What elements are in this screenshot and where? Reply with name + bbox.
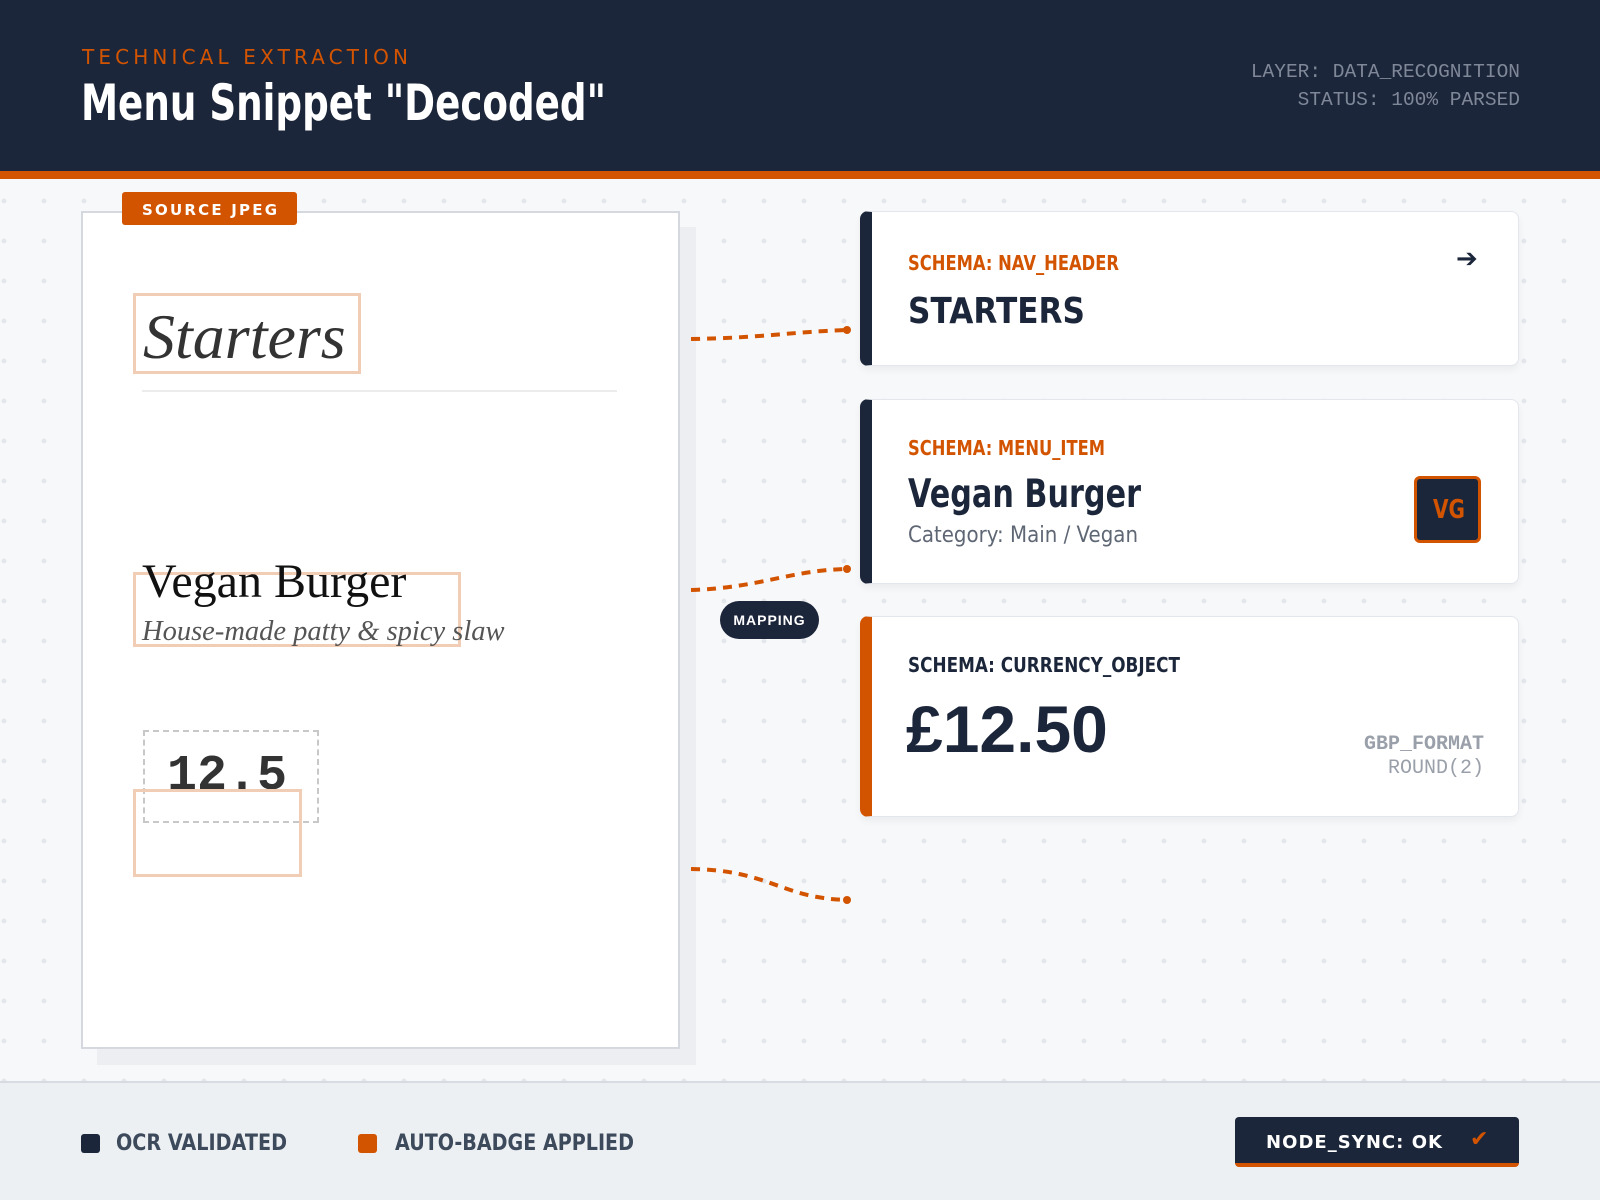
nav header schema: SCHEMA: NAV_HEADER bbox=[908, 251, 1119, 275]
price ocr boxes bbox=[133, 730, 319, 877]
status button: ✔ bbox=[1470, 1127, 1488, 1152]
menu item schema: SCHEMA: MENU_ITEM bbox=[908, 436, 1105, 460]
footer bbox=[0, 1081, 1600, 1200]
panel: source jpeg bbox=[81, 192, 696, 1065]
card: currency object: ROUND(2) bbox=[1388, 757, 1484, 780]
card: currency object: GBP_FORMAT bbox=[1364, 733, 1484, 756]
badge: VG bbox=[1414, 476, 1481, 543]
mapping pill bbox=[720, 601, 819, 639]
legend: ocr validated: OCR VALIDATED bbox=[116, 1131, 287, 1156]
status text: LAYER: DATA_RECOGNITION bbox=[1251, 61, 1520, 83]
header bbox=[0, 0, 1600, 179]
title: Menu Snippet "Decoded" bbox=[81, 74, 606, 132]
eyebrow: TECHNICAL EXTRACTION bbox=[81, 45, 408, 69]
card: nav header bbox=[860, 211, 1519, 366]
status text: STATUS: 100% PARSED bbox=[1298, 89, 1520, 111]
category: Category: Main / Vegan bbox=[908, 523, 1138, 548]
vegan burger value: Vegan Burger bbox=[908, 472, 1142, 517]
status button bbox=[1235, 1117, 1519, 1167]
vegan burger text with box: Vegan Burger bbox=[142, 555, 406, 608]
tag: source jpeg bbox=[122, 192, 297, 225]
card: currency object: £12.50 bbox=[906, 692, 1108, 766]
price ocr boxes: 12.5 bbox=[167, 748, 287, 805]
currency schema: SCHEMA: CURRENCY_OBJECT bbox=[908, 653, 1180, 677]
icon: arrow: ➔ bbox=[1456, 244, 1478, 274]
legend: ocr validated marker bbox=[81, 1134, 100, 1153]
mapping pill: MAPPING bbox=[733, 612, 806, 628]
starters heading with box: Starters bbox=[143, 301, 346, 372]
card: currency object bbox=[860, 616, 1519, 817]
starters value: STARTERS bbox=[908, 291, 1085, 332]
legend: auto-badge applied: AUTO-BADGE APPLIED bbox=[395, 1131, 634, 1156]
vegan burger text with box: House-made patty & spicy slaw bbox=[142, 616, 505, 647]
node sync label: NODE_SYNC: OK bbox=[1266, 1132, 1443, 1153]
VG badge text: VG bbox=[1433, 495, 1465, 525]
status text bbox=[1251, 61, 1520, 111]
vegan burger text with box bbox=[133, 555, 505, 647]
source jpeg label: SOURCE JPEG bbox=[142, 201, 277, 219]
legend: auto-badge marker bbox=[358, 1134, 377, 1153]
card: menu item bbox=[860, 399, 1519, 584]
